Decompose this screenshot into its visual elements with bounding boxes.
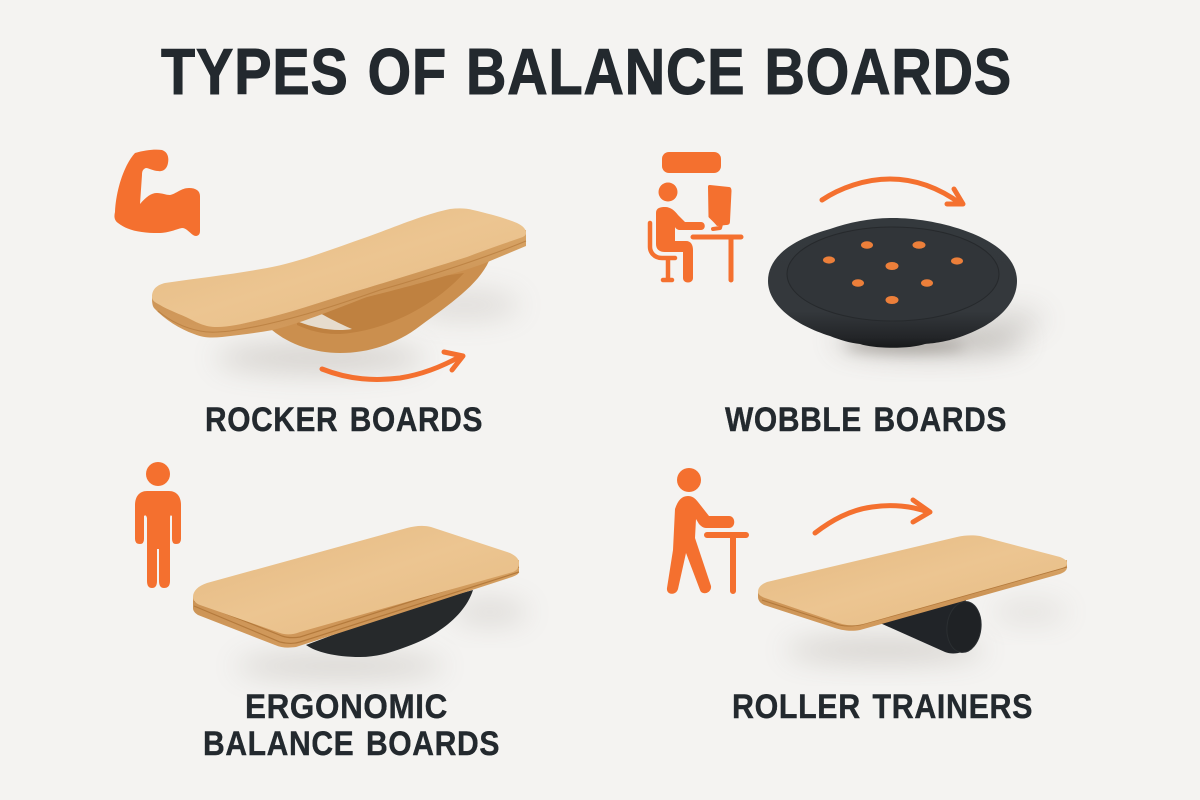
icon: standing person: [135, 462, 181, 588]
arrow: rocker motion: [322, 352, 463, 379]
wobble disc: [768, 218, 1017, 348]
arrow: wobble motion: [822, 179, 963, 204]
plank edge: [758, 560, 1067, 631]
label: ROCKER BOARDS: [205, 401, 483, 439]
shadow: roller board: [785, 601, 1068, 662]
panel: ergonomic balance boards: [135, 462, 528, 763]
shadow: rocker board: [215, 291, 520, 372]
icon: person at standing desk: [667, 468, 746, 594]
plank top: [193, 526, 519, 634]
title: TYPES OF BALANCE BOARDS: [161, 35, 1012, 108]
plank edge: [193, 560, 519, 648]
shadow: ergonomic board: [235, 600, 528, 677]
rocker base: [272, 261, 489, 353]
arrow: roller motion: [815, 500, 930, 533]
wobble inner ring: [787, 227, 999, 321]
wobble dots: [823, 241, 963, 304]
label: ROLLER TRAINERS: [732, 688, 1033, 726]
dark base: [306, 590, 473, 657]
label: [203, 688, 500, 763]
label: WOBBLE BOARDS: [725, 401, 1007, 439]
panel: rocker boards: [114, 150, 526, 439]
label: ERGONOMIC: [245, 688, 448, 726]
panel: wobble boards: [650, 152, 1045, 439]
rocker cutout: [297, 273, 464, 334]
panel: roller trainers: [667, 468, 1068, 726]
plank top: [758, 535, 1067, 625]
label: BALANCE BOARDS: [203, 725, 500, 763]
shadow: wobble board: [835, 308, 1045, 354]
rocker plank edge: [152, 230, 526, 338]
roller cylinder: [880, 598, 984, 654]
rocker plank top: [152, 208, 526, 327]
icon: flexed arm: [114, 150, 200, 236]
icon: person at desk: [650, 152, 741, 282]
